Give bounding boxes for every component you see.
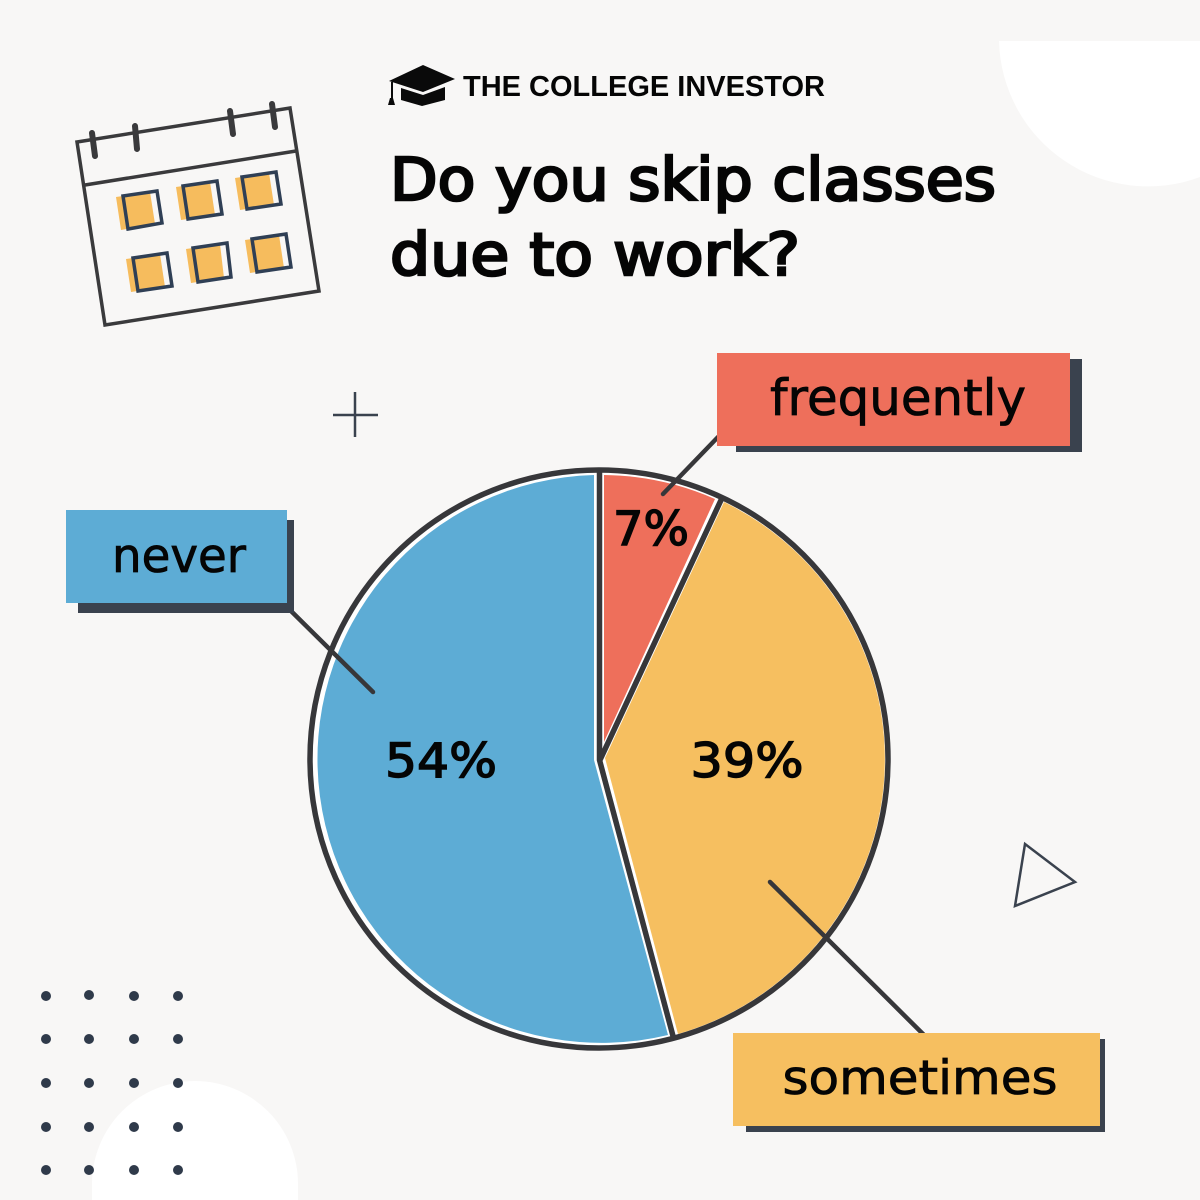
slice: never 54%: [317, 475, 668, 1043]
slice: sometimes 39%: [605, 502, 885, 1034]
label: never: [66, 510, 294, 613]
title: Do you skip classes: [390, 145, 996, 214]
label: frequently: frequently: [770, 369, 1026, 427]
connector: never: [290, 610, 373, 692]
logo: graduation cap: [388, 65, 455, 106]
connector: sometimes: [770, 882, 925, 1036]
value: 7%: 7%: [613, 502, 689, 557]
value: 54%: 54%: [385, 734, 497, 789]
pie chart: [310, 470, 888, 1048]
icon: triangle: [1015, 844, 1075, 906]
logo text: THE COLLEGE INVESTOR: [463, 71, 825, 103]
connector: frequently: [663, 437, 718, 494]
label: sometimes: [733, 1033, 1105, 1132]
decorative circle bottom left: [92, 1081, 298, 1200]
icon: calendar: [77, 104, 319, 325]
value: 39%: 39%: [690, 734, 804, 789]
decorative circle top right: [999, 41, 1200, 186]
dot grid: [41, 990, 183, 1175]
title: [390, 145, 996, 289]
title: due to work?: [390, 220, 800, 289]
label: sometimes: sometimes: [782, 1051, 1058, 1106]
icon: plus: [333, 392, 378, 437]
slice: frequently 7%: [604, 475, 715, 742]
label: frequently: [717, 353, 1082, 452]
label: never: never: [112, 529, 247, 584]
